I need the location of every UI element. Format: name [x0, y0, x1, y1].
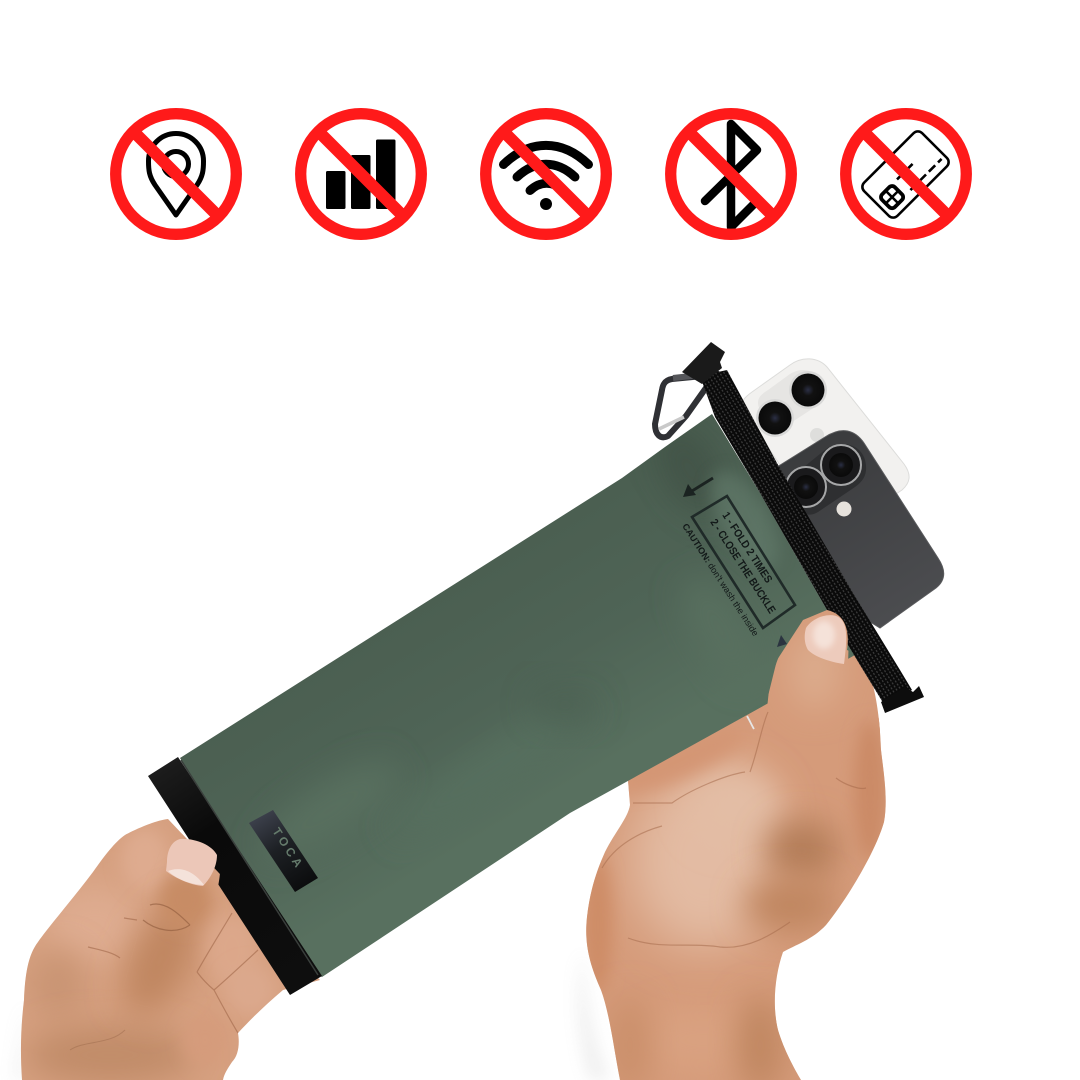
instruction line 2: 2 - CLOSE THE BUCKLE [707, 517, 777, 616]
white phone lens [756, 399, 794, 437]
dark phone lens [821, 445, 861, 485]
right hand base [570, 590, 900, 1080]
right thumb over pouch [745, 610, 880, 732]
small arrow printed [777, 635, 787, 647]
flash [836, 502, 852, 516]
icon: no bluetooth [671, 114, 791, 234]
arrow printed [683, 478, 713, 497]
pouch fabric shading [249, 414, 793, 875]
icon: no cellular signal [301, 114, 421, 234]
white phone [742, 359, 909, 498]
prohibited icons row [116, 114, 966, 234]
pouch body [180, 414, 855, 977]
leather edge highlight [181, 760, 318, 975]
icon: no card / NFC [846, 114, 966, 234]
strap buckle top [682, 342, 725, 384]
TOCA label [249, 810, 318, 892]
carabiner [655, 373, 722, 437]
infographic canvas [20, 108, 972, 1080]
left hand base [10, 810, 330, 1080]
left thumbnail [166, 839, 217, 886]
icon: no location [116, 114, 236, 234]
TOCA wordmark: TOCA [269, 825, 307, 873]
left thumb over pouch [166, 834, 220, 886]
instruction line 1: 1 - FOLD 2 TIMES [719, 510, 774, 585]
caution text: CAUTION: don't wash the inside [680, 522, 761, 638]
strap buckle bottom [881, 686, 924, 713]
black leather end [148, 757, 322, 995]
webbing strap [682, 342, 924, 713]
dark phone lens [786, 467, 826, 507]
pouch [148, 414, 855, 995]
printed instruction box [692, 496, 795, 628]
right thumbnail [805, 615, 846, 664]
soft shadows [14, 950, 610, 1080]
white phone lens [789, 371, 827, 409]
dark phone [777, 431, 944, 628]
icon: no wifi [486, 114, 606, 234]
